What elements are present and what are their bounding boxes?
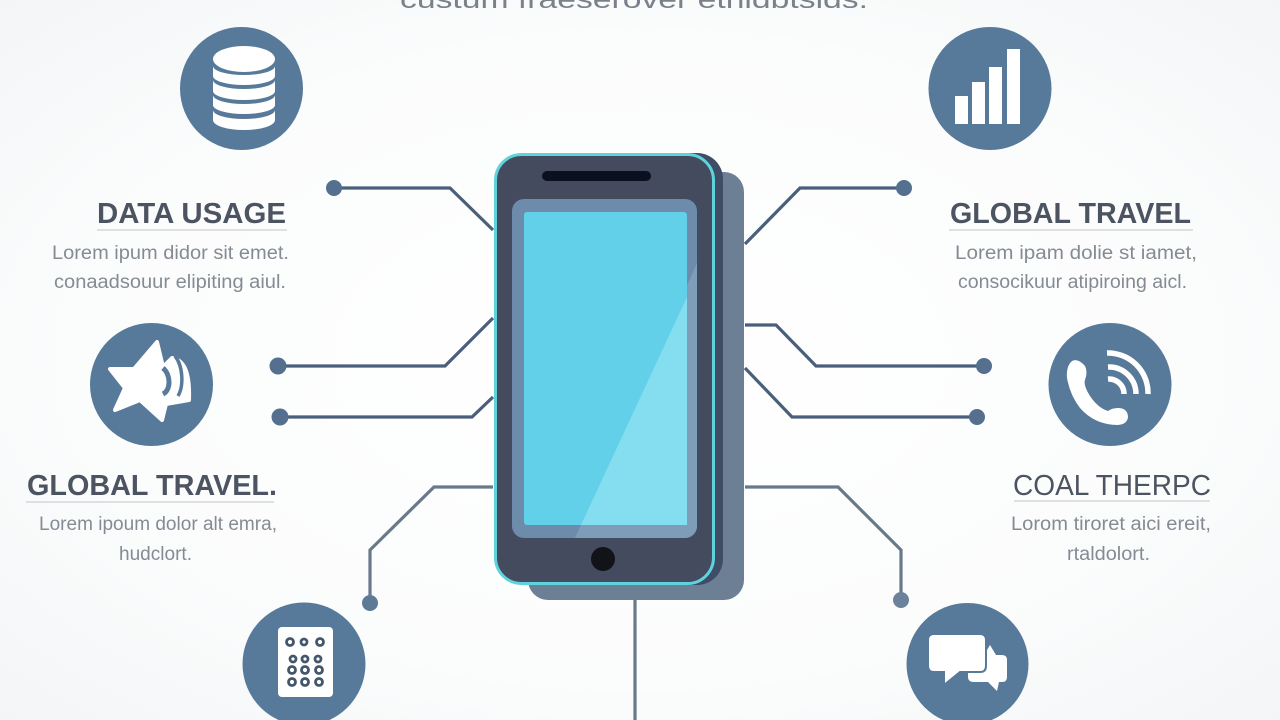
heading: global travel left: GLOBAL TRAVEL. — [27, 470, 277, 502]
connector: data usage — [326, 180, 493, 230]
text: data usage body: Lorem ipum didor sit emet. — [52, 243, 289, 264]
icon: star speaker — [90, 323, 213, 446]
speaker slot — [542, 171, 651, 181]
text: right lower body: rtaldolort. — [1067, 544, 1150, 565]
text: right lower body — [1011, 514, 1211, 565]
icon: database — [180, 27, 303, 150]
connector: right middle lower — [745, 368, 985, 425]
heading: global travel: GLOBAL TRAVEL — [950, 198, 1191, 230]
icon: phone with signal — [1048, 323, 1172, 446]
home button — [591, 547, 615, 571]
connector: chat — [745, 487, 909, 608]
phone dark side — [500, 153, 723, 585]
screen — [524, 212, 687, 525]
smartphone — [496, 153, 744, 600]
block: global travel top right — [928, 27, 1197, 293]
block: global travel left — [26, 323, 277, 565]
screen highlight — [581, 297, 687, 525]
text: global travel body: Lorem ipam dolie st iamet, — [955, 243, 1197, 264]
text: global travel left body — [39, 514, 277, 565]
text: right lower body: Lorom tiroret aici ereit, — [1011, 514, 1211, 535]
heading: data usage: DATA USAGE — [97, 198, 286, 230]
connector: global travel right — [745, 180, 912, 244]
connector: bottom vertical — [633, 598, 637, 720]
heading: garbled right: COAL THERPC — [1013, 470, 1211, 502]
connector lines — [270, 180, 992, 720]
connector: left middle lower — [272, 397, 493, 426]
screen bezel — [512, 199, 697, 538]
text: data usage body: conaadsouur elipiting aiul. — [54, 272, 286, 293]
text: global travel left body: hudclort. — [119, 544, 192, 565]
icon: bar chart — [928, 27, 1052, 150]
icon: chat bubbles — [906, 603, 1028, 720]
block: phone signal right — [1011, 323, 1211, 565]
phone back shadow panel — [528, 172, 744, 600]
connector: right middle upper — [745, 325, 992, 374]
text: data usage body — [52, 243, 289, 293]
block: data usage — [52, 27, 303, 293]
icon: keypad — [242, 602, 366, 720]
text: global travel left body: Lorem ipoum dolor alt emra, — [39, 514, 277, 535]
phone front body — [496, 154, 714, 584]
text: global travel body: consocikuur atipiroing aicl. — [958, 272, 1187, 293]
text: global travel body — [955, 243, 1197, 293]
connector: keypad — [362, 487, 493, 611]
connector: left middle upper — [270, 318, 493, 374]
